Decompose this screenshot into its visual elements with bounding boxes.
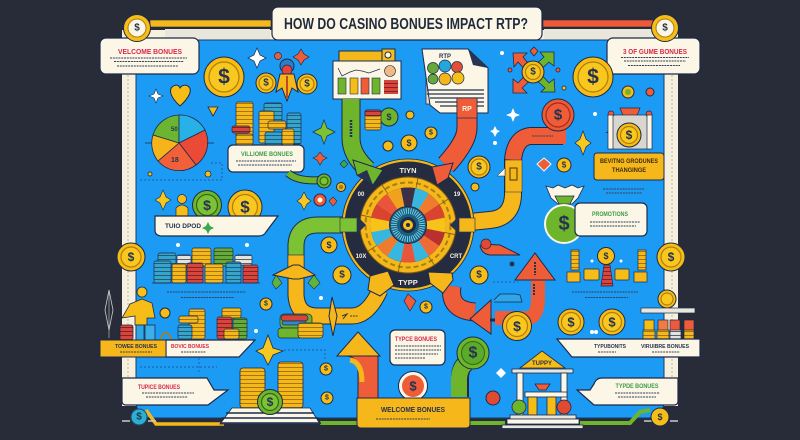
coin: yellow top of deposit label (228, 190, 262, 224)
icon: RTP document (422, 49, 488, 113)
coin: left of rocket (256, 73, 276, 93)
arrow: red and yellow to wheel right (470, 136, 566, 222)
coin: large top left (204, 57, 244, 97)
coin: large top right: $ (587, 66, 599, 88)
coin: yellow bottom right (651, 408, 669, 426)
icon: RTP document: RTP (439, 54, 451, 60)
small coins around wheel: $ (264, 300, 268, 308)
icon: bracket and chips right: $ (603, 251, 609, 261)
text lines: above promotions (603, 189, 645, 193)
small coins around wheel: $ (339, 270, 345, 280)
small coins around wheel: $ (386, 112, 392, 122)
label card: bottom right: TYPDE BONUES (616, 383, 659, 390)
label: type bonuses card: TYPCE BONUES (395, 336, 438, 343)
icon: money bag (545, 185, 584, 243)
panel: blue board (136, 40, 664, 418)
coin: right margin (657, 243, 685, 271)
coin: small red (314, 194, 326, 206)
panel: trophy box with coin (608, 108, 652, 149)
icon: money bag: $ (558, 213, 570, 235)
icon: rocket badge (276, 59, 298, 101)
coin: right row second: $ (608, 314, 616, 330)
sparkle icons (149, 48, 622, 378)
chart: central wheel: 10X (356, 254, 366, 260)
arrow: red from document to wheel (446, 98, 477, 165)
icon: poker chip stack (278, 314, 323, 338)
label card: welcome bonuses centre (228, 145, 304, 172)
coin: lower right arrow (502, 312, 532, 340)
icon: red fruit (486, 391, 500, 405)
arrow: red from document to wheel: RP (462, 106, 472, 113)
label: type and virtual bonuses shelf: TYPUBONITS (594, 344, 626, 350)
wheel connectors (340, 160, 475, 311)
coin: red with dollar (542, 99, 574, 131)
icon: chip row (152, 248, 260, 283)
label card: welcome bonuses top left (100, 38, 199, 74)
arrow: green pipe right of bottom center (459, 362, 468, 397)
small coins around wheel: $ (325, 394, 329, 402)
icon: bracket and chips right (567, 248, 647, 286)
coin: green bottom center (457, 337, 489, 369)
arrow: small green pipe (288, 173, 322, 180)
label: yellow banner betting (594, 153, 664, 180)
icon: temple: TUPPY (532, 361, 552, 367)
chart: pie: 18 (171, 157, 179, 164)
chart: pie: 50 (171, 127, 178, 133)
arrow: red lower right loop (451, 253, 555, 334)
small coins around wheel: $ (562, 160, 567, 170)
coin: left margin: $ (128, 250, 135, 264)
coin: left margin (117, 243, 145, 271)
label card: bottom right (577, 378, 678, 405)
coin: right row first (558, 309, 584, 335)
coin: top right hanger (652, 14, 678, 42)
coin: top left hanger (124, 14, 150, 42)
coin: large top right (573, 57, 613, 97)
label card: game bonuses top right: 3 OF GUME BONUES (623, 47, 687, 56)
coin: red bottom center: $ (409, 378, 417, 394)
coin: right of rocket (297, 74, 317, 94)
icon: business person (105, 287, 172, 340)
label: welcome bonuses yellow banner: WELCOME BONUES (381, 407, 445, 414)
label card: bottom left (122, 378, 228, 405)
label: towee and bovic bonuses shelf: TOWEE BONUES (115, 344, 157, 350)
label card: game bonuses top right (607, 38, 700, 74)
label card: welcome bonuses top left: VELCOME BONUES (118, 47, 182, 56)
icon: small figure (176, 194, 188, 216)
arrow: green and yellow left loop (273, 225, 380, 336)
coin: small yellow (336, 182, 346, 192)
title (272, 7, 542, 40)
coin: teal bottom left: $ (136, 412, 142, 422)
icon: gold stacks on steps: $ (267, 395, 274, 409)
icon: coin stacks centre left (232, 102, 301, 145)
coin: green top of deposit label: $ (203, 197, 211, 213)
dashed guide lines (140, 282, 518, 372)
icon: crossing arrows with coin: $ (530, 66, 536, 78)
paper frame (122, 29, 678, 406)
label card: type deposit: TUIO DPOD (165, 223, 201, 230)
icon: gold stacks on steps (220, 362, 321, 424)
small coins around wheel: $ (476, 162, 482, 172)
label: welcome bonuses yellow banner (357, 398, 470, 428)
text lines: right chips caption (572, 292, 638, 298)
coin: yellow bottom right: $ (657, 412, 663, 422)
chart: pie (138, 115, 222, 180)
small coins around wheel (160, 86, 654, 404)
coin: right margin: $ (668, 250, 675, 264)
coin: right row first: $ (567, 314, 575, 330)
coin: right of rocket: $ (304, 78, 310, 90)
small coins around wheel: $ (324, 366, 328, 372)
coin: red with dollar: $ (554, 106, 563, 124)
label: type bonuses card (390, 330, 445, 365)
arrow: small red pipe (480, 239, 520, 255)
coin: left of rocket: $ (263, 78, 269, 88)
coin: teal bottom left (131, 409, 147, 425)
title: HOW DO CASINO BONUES IMPACT RTP? (284, 16, 528, 33)
label: yellow banner betting: BEVITNG GRODUNES (600, 159, 658, 165)
label card: promotions: PROMOTIONS (592, 211, 629, 218)
label card: welcome bonuses centre: VILLIOME BONUES (241, 151, 294, 158)
chart: central wheel: TIYN (399, 166, 417, 175)
chart: central wheel: 19 (454, 192, 461, 198)
chart: central wheel (342, 159, 474, 291)
icon: crossing arrows with coin (508, 47, 566, 93)
coin: yellow top of deposit label: $ (240, 198, 250, 216)
panel: trophy box with coin: $ (626, 128, 633, 142)
label: towee and bovic bonuses shelf: BOVIC BONUES (171, 344, 209, 350)
label: towee and bovic bonuses shelf (100, 340, 255, 357)
small coins around wheel: $ (424, 304, 428, 310)
icon: coin stacks on shelf (178, 308, 247, 339)
coin: green top of deposit label (192, 190, 222, 220)
connector lines top and bottom (122, 20, 678, 424)
small coins around wheel: $ (326, 240, 332, 250)
chart: bar panel (333, 49, 401, 99)
label: type and virtual bonuses shelf: VIRUIBRE BONUES (641, 344, 689, 350)
coin: green bottom center: $ (469, 344, 478, 362)
chart: central wheel: 00 (358, 192, 365, 198)
icon: heart (171, 85, 218, 116)
label card: type deposit (155, 216, 278, 236)
arrow: green from chart to wheel (351, 99, 368, 170)
small coins around wheel: $ (429, 130, 433, 136)
text lines: chip row caption (167, 292, 246, 298)
arrow: yellow and red bottom center (337, 332, 380, 398)
label: yellow banner betting: THANGINGE (612, 168, 646, 174)
small coins around wheel: $ (406, 138, 412, 148)
coin: lower right arrow: $ (513, 318, 521, 334)
coin: top right hanger: $ (662, 22, 668, 34)
coin: green small (317, 174, 331, 188)
coin: red bottom center (398, 372, 428, 400)
label: type and virtual bonuses shelf (557, 339, 700, 357)
small coins around wheel: $ (476, 270, 482, 280)
coin: right row second (599, 309, 625, 335)
chart: central wheel: CRT (450, 254, 462, 260)
label card: bottom left: TUPICE BONUES (138, 385, 180, 391)
icon: small coin pile under chart (365, 110, 381, 130)
icon: columns on shelf (641, 290, 695, 340)
chart: central wheel: TYPP (398, 278, 418, 287)
icon: temple (502, 351, 583, 428)
coin: top left hanger: $ (134, 22, 140, 34)
label card: promotions (575, 203, 647, 236)
coin: large top left: $ (218, 66, 230, 88)
